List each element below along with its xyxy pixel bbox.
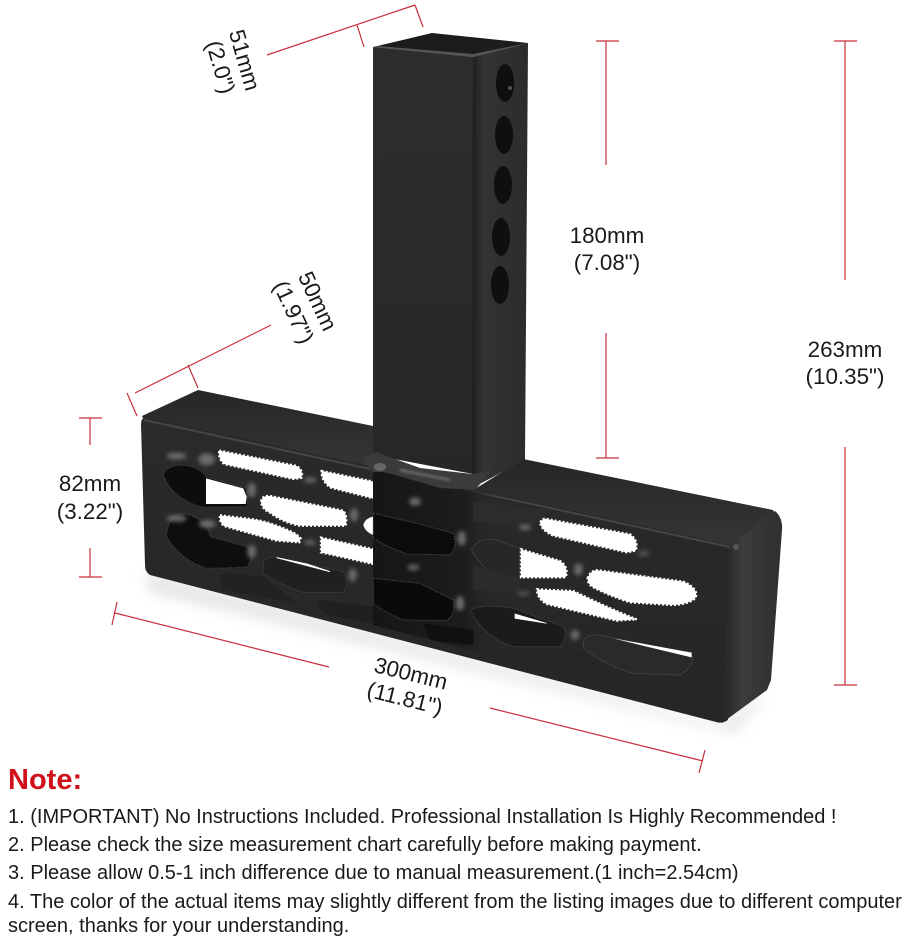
dimension labels: 51mm — [224, 27, 265, 93]
note line 1: 1. (IMPORTANT) No Instructions Included. Professional Installation Is Highly Recommended ! — [8, 806, 836, 828]
stem side face — [472, 43, 528, 488]
hitch step base — [141, 390, 782, 723]
adjustment holes — [491, 64, 514, 304]
note heading: Note: — [8, 764, 82, 796]
right perforations — [470, 502, 696, 687]
dimension labels: 300mm — [372, 652, 450, 695]
dimension labels: (10.35") — [806, 364, 884, 389]
floor shadow — [145, 572, 768, 733]
dimension labels: (2.0") — [201, 38, 240, 97]
dimension labels: (11.81") — [364, 677, 445, 720]
dimension lines — [79, 5, 857, 773]
vertical stem tube — [363, 33, 528, 490]
note line 4 — [8, 891, 902, 937]
front top edge highlight — [144, 420, 730, 547]
dimension labels: 82mm — [59, 471, 121, 496]
dimension labels — [57, 27, 884, 720]
dimension labels: 263mm — [808, 337, 882, 362]
note line 4: 4. The color of the actual items may slightly different from the listing images due to different computer — [8, 891, 902, 913]
top face of base — [142, 390, 373, 470]
dimension labels: (1.97") — [268, 277, 319, 348]
dimension labels: 50mm — [293, 268, 342, 335]
dimension labels: 180mm — [570, 223, 644, 248]
sheen spots — [167, 453, 358, 582]
note line 4: screen, thanks for your understanding. — [8, 915, 349, 937]
note line 2: 2. Please check the size measurement chart carefully before making payment. — [8, 834, 702, 856]
stem front face — [373, 47, 473, 474]
stem opening — [373, 33, 528, 57]
note line 3: 3. Please allow 0.5-1 inch difference due to manual measurement.(1 inch=2.54cm) — [8, 862, 739, 884]
shaded centre section under the stem — [373, 470, 500, 658]
centre perforations — [373, 498, 530, 645]
left perforations — [163, 451, 373, 623]
dimension labels: (7.08") — [574, 250, 640, 275]
end face of base — [722, 511, 782, 723]
dimension labels: (3.22") — [57, 499, 123, 524]
weld seam — [363, 452, 492, 490]
front face of base — [141, 417, 730, 723]
